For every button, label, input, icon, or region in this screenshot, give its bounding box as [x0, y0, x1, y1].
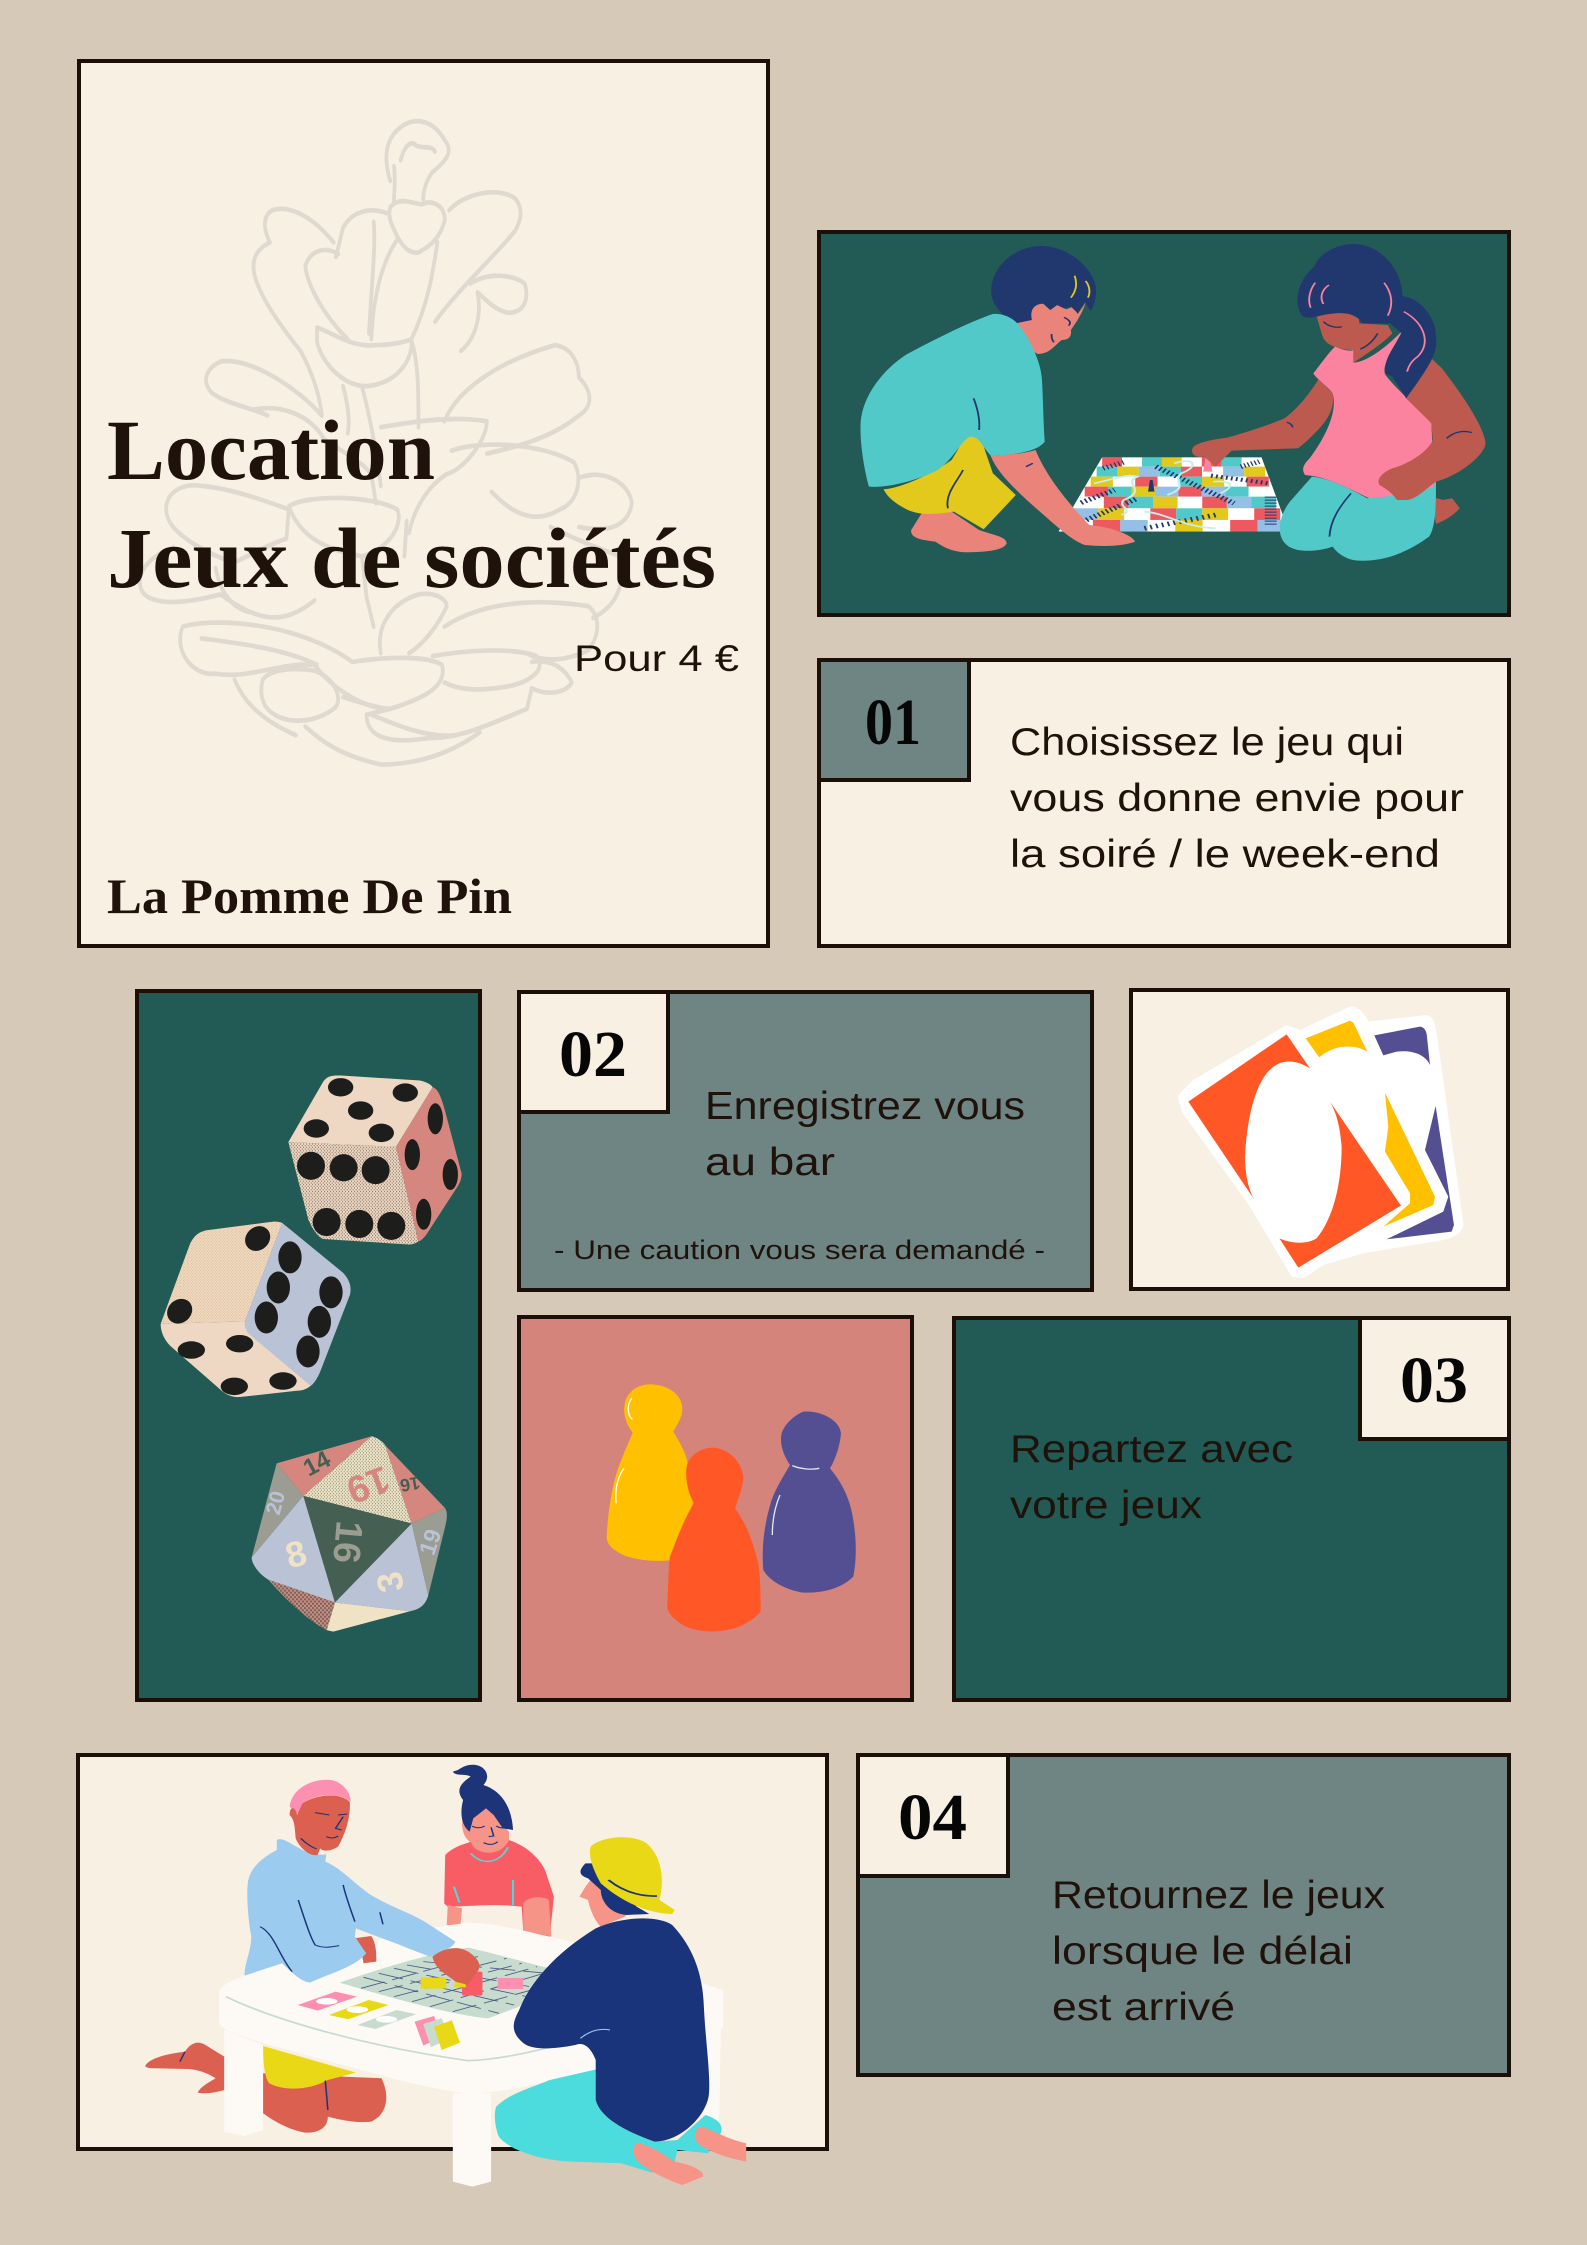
die numbers: 14	[299, 1446, 336, 1482]
illustration: three people at table	[145, 1765, 746, 2187]
step 04 text	[1052, 1874, 1386, 2029]
illustration: playing cards	[1178, 1006, 1463, 1278]
illustration: dice	[161, 1076, 462, 1632]
step 04 text: Retournez le jeux	[1052, 1874, 1386, 1917]
tab 03: 03	[1400, 1344, 1468, 1417]
orange pawn	[667, 1448, 761, 1632]
icon: pine cone outline	[140, 121, 632, 765]
front table leg	[453, 2093, 491, 2187]
tab 02: 02	[559, 1018, 627, 1091]
panel: children playing board game	[819, 232, 1509, 615]
step 03 text: votre jeux	[1010, 1484, 1203, 1527]
step 01 text: la soiré / le week-end	[1010, 833, 1440, 876]
die one	[288, 1076, 462, 1245]
woman with yellow cap	[495, 1837, 746, 2185]
title text: Jeux de sociétés	[107, 510, 716, 606]
tab 04: 04	[898, 1781, 967, 1854]
venue name: La Pomme De Pin	[107, 868, 512, 924]
step 02 text: Enregistrez vous	[705, 1085, 1025, 1128]
board on table	[340, 1948, 550, 2018]
die numbers: 20	[262, 1489, 290, 1517]
boy	[860, 246, 1135, 552]
panel: title	[79, 61, 768, 946]
die numbers: 16	[398, 1472, 422, 1496]
tab 03	[1360, 1318, 1509, 1439]
die numbers: 19	[414, 1526, 446, 1558]
man in sweater	[245, 1780, 479, 1985]
girl	[1192, 244, 1486, 561]
panel: dice	[137, 991, 480, 1700]
die numbers: 16	[324, 1519, 370, 1565]
tab 01	[819, 660, 969, 780]
yellow pawn	[607, 1384, 693, 1561]
twenty sided die	[252, 1436, 447, 1632]
step 02 text	[705, 1085, 1025, 1184]
girl in background	[444, 1765, 554, 1937]
price: Pour 4 €	[574, 638, 739, 679]
panel: people around a table	[78, 1755, 827, 2187]
tab 02	[519, 992, 668, 1112]
panel: step 02	[519, 992, 1092, 1290]
money cards	[298, 1992, 460, 2050]
step 01 text: vous donne envie pour	[1010, 777, 1464, 820]
panel: pawns	[519, 1317, 912, 1700]
tab 04	[858, 1755, 1008, 1876]
panel: step 04	[858, 1755, 1509, 2075]
step 04 text: est arrivé	[1052, 1986, 1235, 2029]
tab 01: 01	[865, 686, 921, 759]
table legs	[224, 2030, 721, 2136]
title text: Location	[107, 402, 435, 498]
game board	[1057, 457, 1291, 533]
step 03 text: Repartez avec	[1010, 1428, 1293, 1471]
seated left person legs	[145, 2043, 386, 2133]
title text	[107, 402, 716, 606]
die numbers: 8	[281, 1532, 311, 1576]
table top	[219, 1923, 723, 2094]
die numbers: 3	[368, 1569, 412, 1595]
step 02 text: au bar	[705, 1141, 835, 1184]
panel: step 01	[819, 660, 1509, 946]
step 01 text: Choisissez le jeu qui	[1010, 721, 1404, 764]
step 03 text	[1010, 1428, 1293, 1527]
die numbers	[262, 1446, 446, 1595]
illustration: boy and girl with board	[860, 244, 1486, 561]
panel: step 03	[954, 1318, 1509, 1700]
panel: cards	[1131, 990, 1508, 1289]
die two	[161, 1222, 351, 1397]
step 04 text: lorsque le délai	[1052, 1930, 1353, 1973]
purple pawn	[763, 1411, 856, 1593]
deposit note: - Une caution vous sera demandé -	[554, 1235, 1045, 1265]
die numbers: 19	[341, 1457, 395, 1511]
illustration: game pawns	[607, 1384, 856, 1632]
step 01 text	[1010, 721, 1464, 876]
